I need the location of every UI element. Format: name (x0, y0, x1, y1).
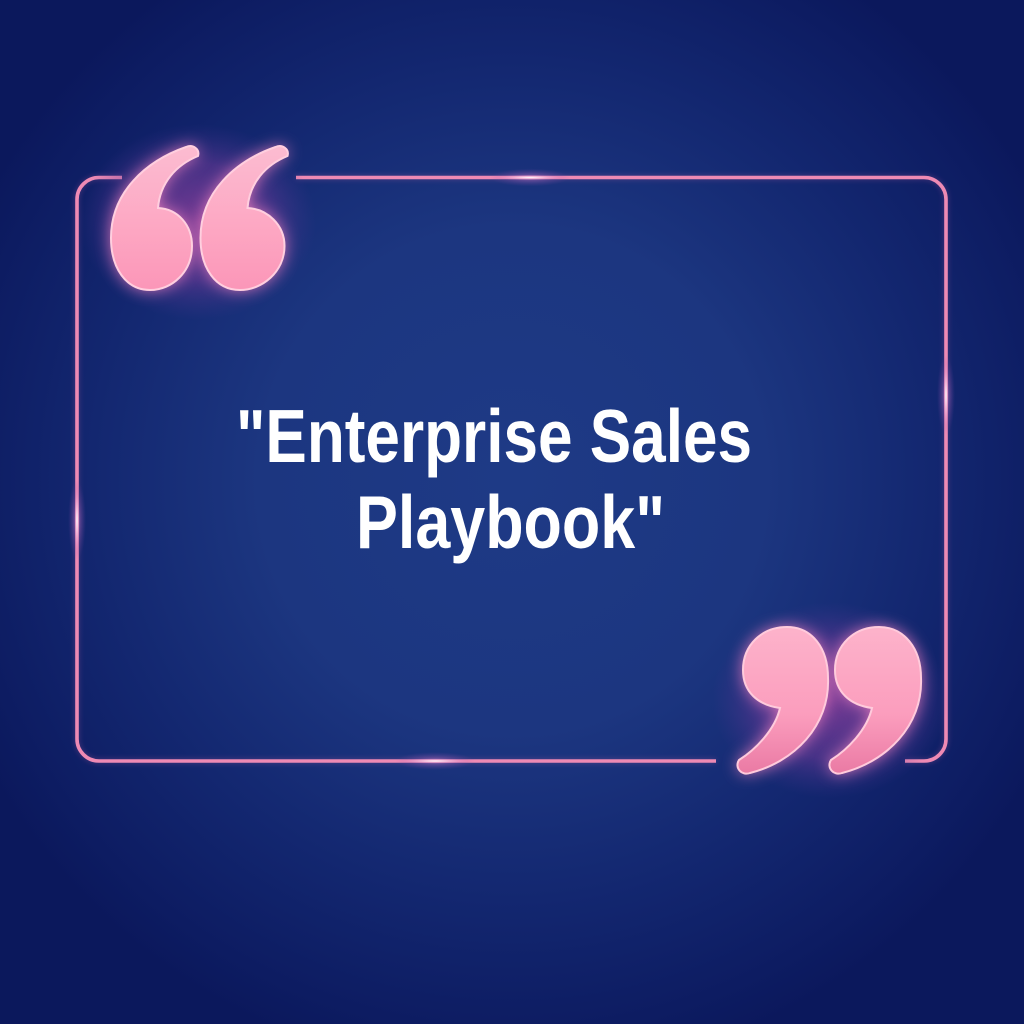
title: "Enterprise Sales (236, 394, 752, 478)
title (236, 394, 752, 564)
icon: opening quotation marks (80, 124, 316, 320)
title: Playbook" (356, 480, 665, 564)
quote frame (68, 168, 955, 770)
icon: closing quotation marks (712, 602, 948, 798)
light glints on frame (68, 168, 955, 770)
